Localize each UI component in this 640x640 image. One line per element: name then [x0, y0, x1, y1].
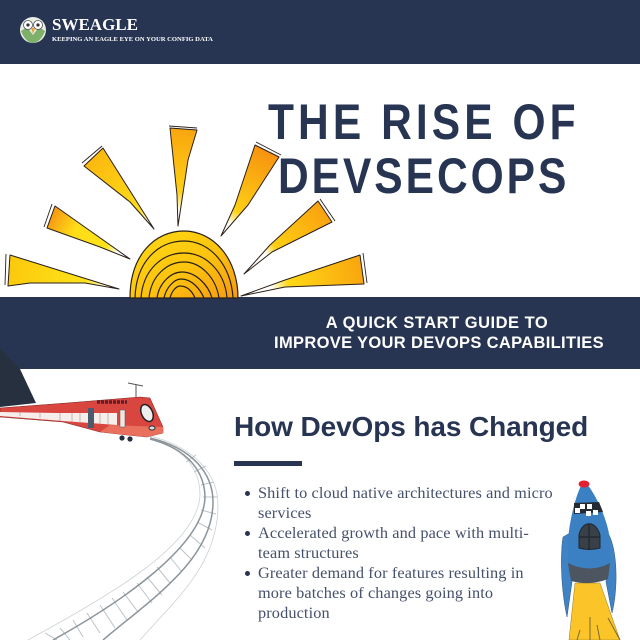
heading: How DevOps has Changed	[234, 411, 588, 442]
subtitle: A QUICK START GUIDE TO	[326, 314, 548, 332]
tagline: KEEPING AN EAGLE EYE ON YOUR CONFIG DATA	[52, 36, 213, 43]
train body	[0, 397, 163, 437]
icon: owl logo	[20, 17, 46, 43]
bullet list: production	[258, 603, 330, 622]
header bar	[0, 0, 640, 64]
subtitle band	[0, 297, 640, 369]
hill	[0, 348, 36, 407]
subtitle: IMPROVE YOUR DEVOPS CAPABILITIES	[274, 334, 604, 352]
bullet list	[245, 483, 553, 622]
bullet list: more batches of changes going into	[258, 583, 493, 602]
tracks	[28, 436, 218, 640]
title: DEVSECOPS	[278, 148, 569, 204]
subtitle	[274, 314, 604, 352]
divider	[234, 461, 302, 466]
brand name: SWEAGLE	[52, 15, 138, 34]
bullet list: team structures	[258, 543, 359, 562]
bullet list: Accelerated growth and pace with multi-	[258, 523, 529, 542]
windshield	[138, 403, 156, 423]
title	[268, 94, 580, 204]
bullet list: Shift to cloud native architectures and micro	[258, 483, 553, 502]
title: THE RISE OF	[268, 94, 580, 150]
bullet list: Greater demand for features resulting in	[258, 563, 524, 582]
bullet list: services	[258, 503, 311, 522]
